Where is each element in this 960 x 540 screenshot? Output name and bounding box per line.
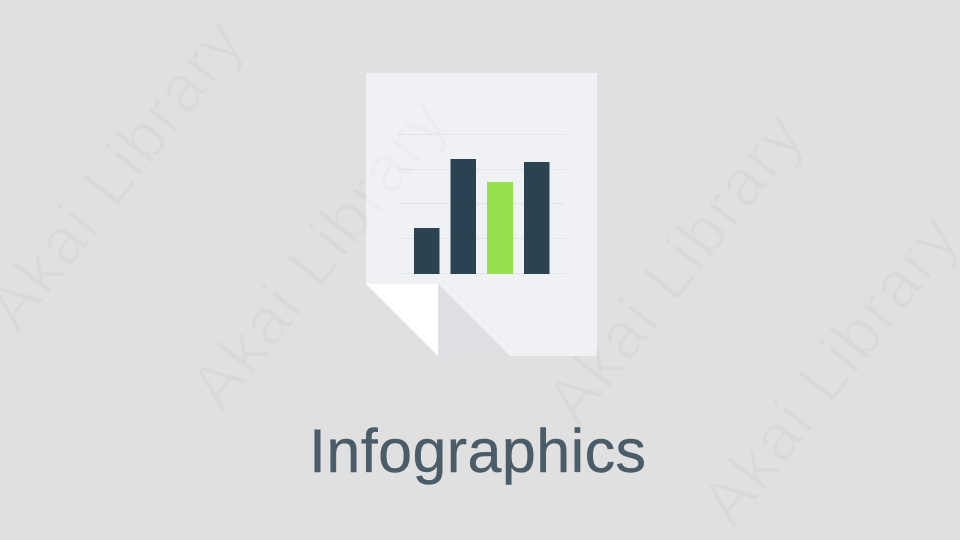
watermark on paper: Akai Library	[531, 98, 818, 437]
folded corner: white flap	[366, 284, 438, 356]
watermark on paper: Akai Library	[175, 84, 462, 423]
paper sheet	[366, 73, 597, 356]
watermarks: Akai Library	[175, 84, 462, 423]
watermark on paper	[175, 84, 818, 437]
title: Infographics	[309, 417, 646, 485]
chart grid lines	[399, 134, 565, 274]
folded corner: shadow	[438, 284, 510, 356]
watermarks: Akai Library	[531, 98, 818, 437]
document icon	[366, 73, 597, 356]
bar chart	[414, 159, 550, 274]
